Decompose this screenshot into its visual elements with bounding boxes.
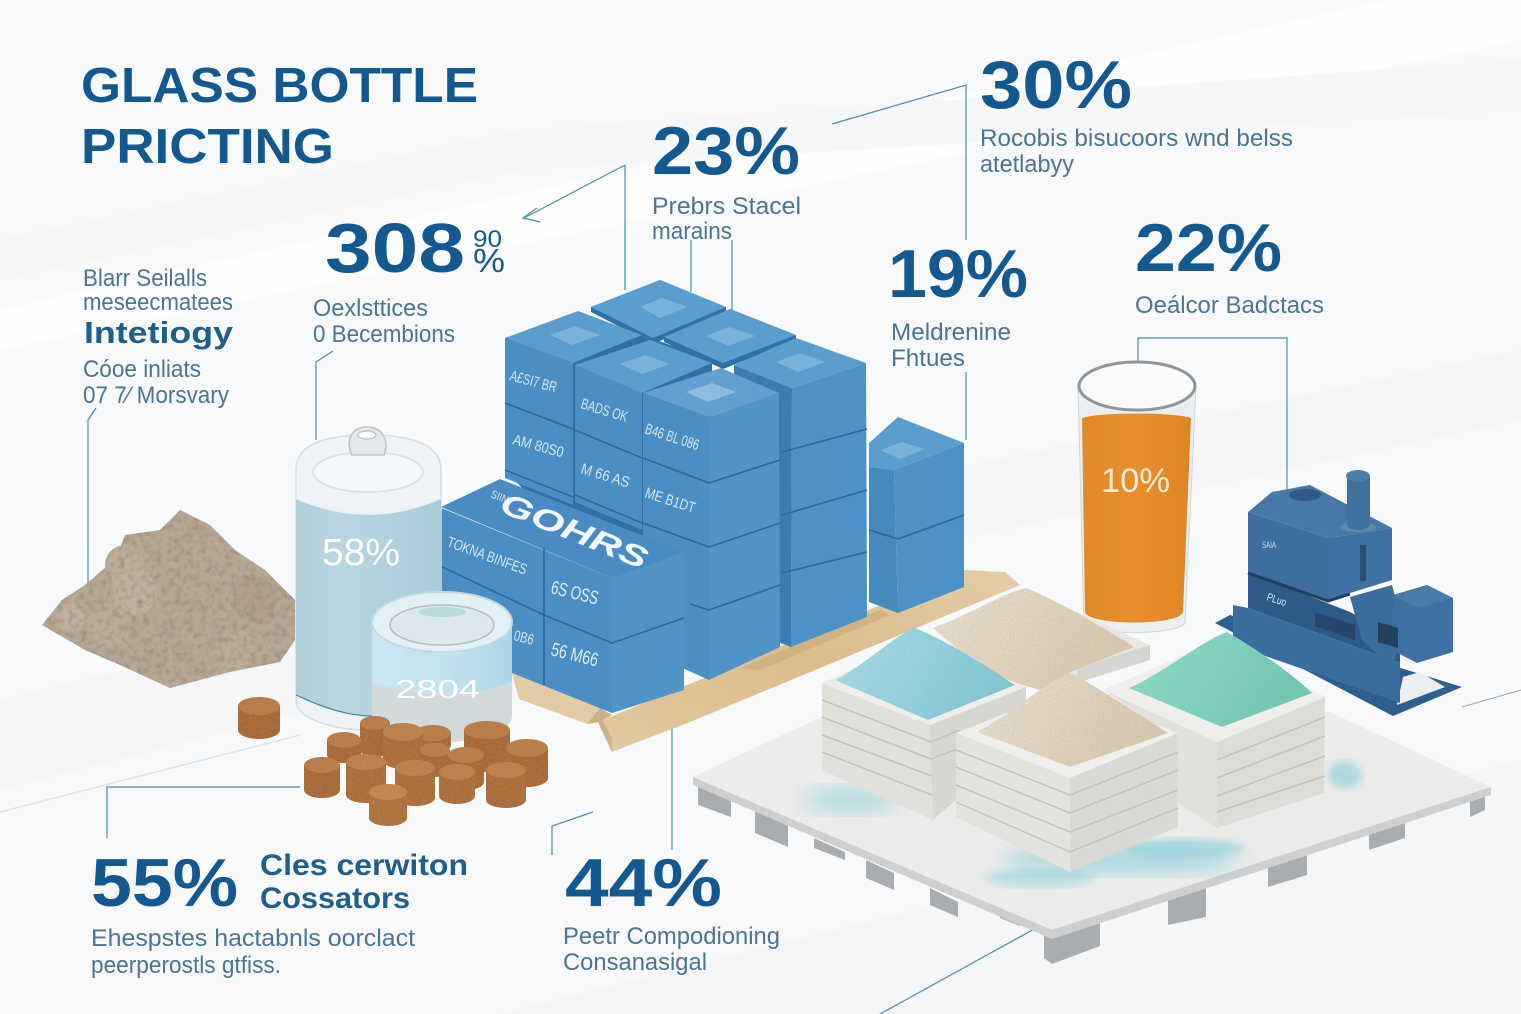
box label: A£SI7 BR: [508, 367, 559, 396]
machinery: [1315, 612, 1355, 640]
tall box stacks: [505, 280, 867, 680]
stat: 19%: Fhtues: [891, 345, 965, 372]
box stack: second rear: [664, 309, 796, 369]
title: PRICTING: [81, 120, 334, 174]
stat: 44%: Peetr Compodioning: [563, 923, 780, 950]
stat: 308%: 90: [473, 226, 502, 253]
title: [81, 59, 478, 174]
stat: 308%: 308: [325, 209, 465, 287]
label: small brand: SIIN: [489, 489, 510, 507]
platform top: [693, 712, 1491, 930]
box stack: front: [643, 368, 780, 680]
box stack: middle: [575, 340, 712, 530]
small glass jar: [372, 592, 512, 742]
powder tray: left blue: [822, 628, 1026, 820]
stat: 55%: Cossators: [260, 882, 410, 915]
stat: 19%: 19%: [888, 236, 1028, 312]
cork pellets: [238, 697, 548, 826]
stat: 308%: 0 Becembions: [313, 321, 455, 348]
box stack: far right: [734, 338, 867, 647]
value: 10%: 10%: [1101, 462, 1170, 500]
text block: left intensity: Blarr Seilalls: [83, 265, 207, 292]
stat: 308%: %: [473, 242, 505, 279]
back small box stack: [869, 417, 964, 613]
stat: 30%: [980, 47, 1293, 178]
box label: ME B1DT: [643, 485, 697, 517]
label: 0B6: 0B6: [512, 627, 536, 649]
stat: 55%: 55%: [91, 845, 238, 921]
front low box: [439, 479, 684, 713]
stat: 19%: [888, 236, 1028, 372]
blue dust: [802, 761, 1362, 887]
box label: AM 80S0: [511, 431, 566, 461]
value: 2804: 2804: [395, 674, 480, 704]
housing top: [1393, 585, 1453, 608]
stat: 22%: [1135, 210, 1324, 319]
stat: 44%: Consanasigal: [563, 949, 707, 976]
housing slot: [1378, 622, 1398, 648]
label: 6S: 6S OSS: [549, 577, 600, 609]
stat: 30%: atetlabyy: [980, 151, 1074, 178]
stat: 23%: 23%: [652, 113, 800, 189]
right housing: [1392, 585, 1453, 663]
text block: left intensity: meseecmatees: [83, 289, 233, 316]
stat: 23%: Prebrs Stacel: [652, 193, 801, 220]
powder tray: back beige: [933, 588, 1150, 690]
box stack: rear: [591, 280, 726, 344]
powder tray: front beige: [956, 673, 1178, 872]
stat: 308%: Oexlsttices: [313, 295, 428, 322]
leader lines: [88, 85, 1287, 1014]
machine underside: [1248, 572, 1400, 663]
machine foot frame: [1215, 615, 1462, 716]
text block: left intensity: Intetiogy: [84, 315, 234, 350]
machine: [1215, 470, 1462, 716]
box label: BADS OK: [579, 396, 630, 426]
machine body: [1248, 485, 1392, 601]
stat: 22%: Oeálcor Badctacs: [1135, 292, 1324, 319]
value: 58%: 58%: [322, 532, 400, 574]
stat: 55%: Ehespstes hactabnls oorclact: [91, 925, 415, 952]
stat: 22%: 22%: [1135, 210, 1282, 286]
title: GLASS BOTTLE: [81, 59, 478, 113]
stat: 19%: Meldrenine: [891, 319, 1011, 346]
stat: 23%: marains: [652, 218, 732, 245]
platform front edge: [693, 777, 1491, 939]
stat: 30%: Rocobis bisucoors wnd belss: [980, 125, 1293, 152]
large glass bottle: [296, 427, 441, 730]
machine base panel: [1233, 605, 1400, 703]
box label: M 66 AS: [579, 461, 632, 491]
stat: 44%: [563, 845, 780, 976]
text block: left intensity: Cóoe inliats: [83, 356, 201, 383]
box stack: left: [505, 311, 642, 505]
sand pile: [42, 510, 295, 688]
wooden pallet: [512, 570, 1020, 752]
machine logo: SAIA: [1262, 540, 1276, 550]
text block: left intensity: [83, 265, 234, 409]
stat: 55%: [91, 845, 468, 979]
stat: 44%: 44%: [565, 845, 722, 921]
stat: 55%: Cles cerwiton: [260, 849, 468, 882]
label: box text upper: TOKNA BINFES: [445, 534, 529, 578]
powder tray: right teal: [1103, 632, 1325, 828]
chimney: [1340, 470, 1376, 532]
stat: 55%: peerperostls gtfiss.: [91, 952, 281, 979]
stack backing: [505, 335, 712, 610]
box label: B46 BL 086: [643, 421, 701, 454]
stat: 30%: 30%: [980, 47, 1132, 123]
stat: 308%: [313, 209, 505, 348]
frame opening: [1397, 672, 1445, 705]
white platform: [693, 712, 1491, 964]
text block: left intensity: 07 7⁄ Morsvary: [83, 382, 229, 409]
platform feet: [698, 785, 1485, 964]
glass of orange liquid: [1078, 362, 1196, 632]
machine label: PLuo: [1265, 591, 1288, 609]
label: box brand: GOHRS: [495, 487, 652, 576]
label: 56: 56 M66: [549, 639, 600, 671]
stat: 23%: [652, 113, 801, 245]
mid housing: [1350, 585, 1396, 668]
